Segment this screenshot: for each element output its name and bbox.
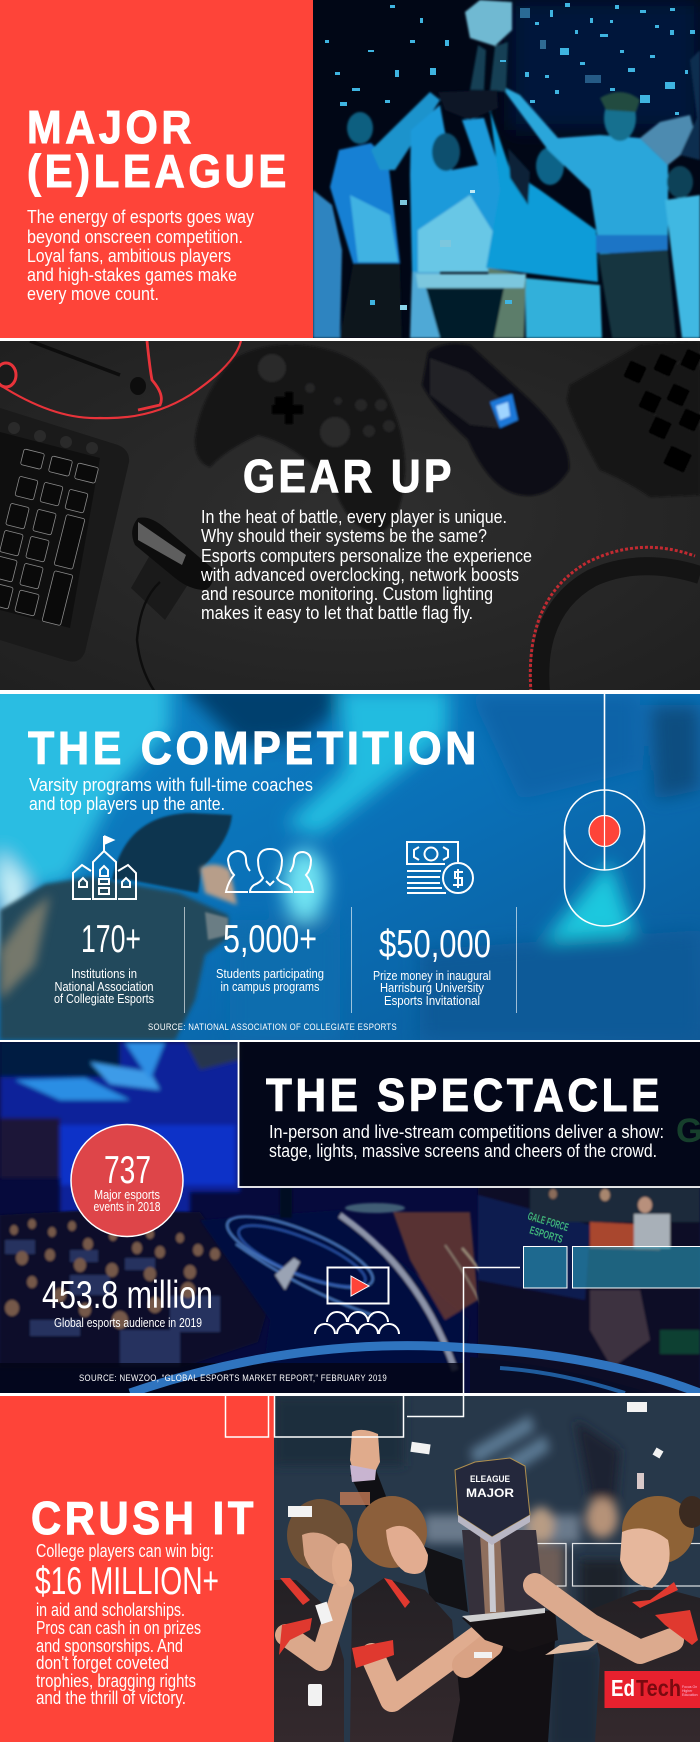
icon: headset [530, 547, 700, 692]
intro text: beyond onscreen competition. [27, 227, 243, 247]
text: gear up body: makes it easy to let that battle flag fly. [201, 603, 473, 623]
icon: money [407, 842, 473, 893]
logo: edtech: Education [682, 1693, 698, 1697]
text: gear up body: In the heat of battle, every player is unique. [201, 507, 507, 527]
photo: hand holding mouse [0, 813, 237, 1040]
text: competition body [29, 775, 313, 814]
overlay outline squares behind players [532, 1544, 700, 1586]
stage [200, 1188, 480, 1372]
panel: gear up [0, 341, 700, 692]
blurred blue background [0, 694, 700, 1040]
stat: audience: 453.8 million [42, 1274, 213, 1317]
text: crush it body: College players can win big: [36, 1541, 214, 1561]
intro text: The energy of esports goes way [27, 207, 254, 227]
podium [416, 274, 526, 288]
title: major (e)league: MAJOR [27, 101, 195, 153]
icon: red earbuds cable [0, 341, 241, 418]
intro text: every move count. [27, 284, 159, 304]
panel: the spectacle [0, 1042, 700, 1393]
stat circle: 737 events: 737 [104, 1149, 151, 1192]
heading: crush it: CRUSH IT [31, 1492, 257, 1544]
spectacle text box [238, 1042, 700, 1187]
crowd [0, 1210, 268, 1368]
intro text: Loyal fans, ambitious players [27, 246, 231, 266]
text: competition body: and top players up the ante. [29, 794, 225, 814]
heading: gear up: GEAR UP [243, 450, 455, 502]
text: gear up body: and resource monitoring. Custom lighting [201, 584, 493, 604]
text: crush it body: Pros can cash in on prizes [36, 1618, 201, 1638]
stat: 5,000+: 5,000+ [223, 918, 317, 961]
icon: people [226, 849, 313, 892]
logo: edtech: Tech [636, 1675, 681, 1701]
booth screen text: ESPORTS [528, 1225, 564, 1246]
trophy with league text: MAJOR [466, 1486, 514, 1500]
stat: 5,000+: in campus programs [220, 979, 320, 994]
stat: $50,000 [373, 923, 491, 1008]
text: gear up body: with advanced overclocking, network boosts [200, 565, 519, 585]
panel: the competition [0, 680, 700, 1040]
dark centre figure [448, 1640, 555, 1742]
teal overlay squares [524, 1246, 700, 1288]
icon: mouse outline with red button [564, 694, 644, 926]
stat: $50,000: $50,000 [379, 923, 491, 966]
text: crush it body: $16 MILLION+ [35, 1560, 219, 1603]
dark bottom band [0, 1363, 463, 1393]
red intro background [0, 0, 313, 338]
stat: audience: Global esports audience in 2019 [54, 1315, 202, 1330]
booth screen text [522, 1210, 570, 1247]
text: spectacle body: stage, lights, massive screens and cheers of the crowd. [269, 1141, 657, 1161]
text: crush it body [35, 1541, 219, 1708]
logo: edtech: Ed [611, 1675, 635, 1701]
heading: the spectacle: THE SPECTACLE [266, 1069, 663, 1121]
text: spectacle body [269, 1122, 664, 1161]
left player [330, 143, 400, 263]
photo: players lifting trophy [274, 1396, 700, 1742]
stat circle: 737 events: events in 2018 [94, 1199, 160, 1214]
intro text: and high-stakes games make [27, 265, 237, 285]
photo: team lifting trophy in blue confetti [313, 0, 700, 338]
left player [274, 1499, 353, 1742]
stat: audience [42, 1274, 213, 1330]
source: competition: SOURCE: NATIONAL ASSOCIATION OF COLLEGIATE ESPORTS [148, 1022, 397, 1033]
blue arcs [130, 1346, 700, 1393]
icon: school [73, 836, 136, 899]
confetti [325, 3, 695, 310]
logo: edtech: Focus On [682, 1685, 697, 1689]
stat: 5,000+ [216, 925, 324, 994]
logo: edtech [604, 1671, 700, 1708]
text: crush it body: and sponsorships. And [36, 1636, 183, 1656]
icon: webcam [131, 517, 213, 692]
logo: edtech: Higher [682, 1689, 693, 1693]
stat: $50,000: Esports Invitational [384, 993, 480, 1008]
stat: 170+: National Association [54, 979, 154, 994]
photo: arena with crowd and stage [0, 1042, 700, 1393]
icon: game controller [195, 345, 405, 533]
middle player [350, 1430, 490, 1742]
stat: $50,000: Prize money in inaugural [373, 968, 491, 983]
icon: video and audience [315, 1268, 399, 1334]
centre player [410, 105, 506, 272]
trophy [465, 0, 512, 46]
dark desk background [0, 341, 700, 690]
third player [486, 110, 598, 282]
text: competition body: Varsity programs with full-time coaches [29, 775, 313, 795]
icon: keyboard [0, 408, 129, 662]
right player [535, 1496, 700, 1742]
panel: major eleague intro [0, 0, 700, 338]
trophy with league text [455, 1458, 558, 1652]
stat: 170+: 170+ [81, 918, 141, 961]
text: crush it body: in aid and scholarships. [36, 1600, 185, 1620]
icon: gaming mouse [422, 344, 569, 496]
text: gear up body: Esports computers personalize the experience [201, 546, 532, 566]
stat circle: 737 events [71, 1124, 183, 1236]
red crush it background [0, 1396, 274, 1742]
right player [500, 85, 668, 254]
icon: keypad [567, 341, 700, 497]
source: spectacle: SOURCE: NEWZOO, “GLOBAL ESPORTS MARKET REPORT,” FEBRUARY 2019 [79, 1373, 387, 1384]
stat: 170+ [54, 918, 154, 1006]
trophy with league text: ELEAGUE [470, 1474, 510, 1484]
stat: 5,000+: Students participating [216, 966, 324, 981]
overlay outlined rectangles and connector lines [226, 1268, 520, 1437]
right booth [478, 1187, 700, 1393]
text: gear up body: Why should their systems be the same? [201, 526, 487, 546]
stat: $50,000: Harrisburg University [380, 980, 484, 995]
stat: 170+: Institutions in [71, 966, 137, 981]
title: major (e)league [27, 101, 290, 197]
text: gear up body [200, 507, 532, 623]
text: crush it body: don't forget coveted [36, 1653, 169, 1673]
right edge person [665, 195, 700, 338]
white separator [0, 1393, 700, 1396]
intro text [27, 207, 254, 304]
confetti pieces [288, 1402, 663, 1706]
heading: the competition: THE COMPETITION [28, 722, 480, 774]
stat: 170+: of Collegiate Esports [54, 991, 154, 1006]
booth screen text: GALE FORCE [526, 1210, 570, 1234]
stat circle: 737 events: Major esports [94, 1187, 160, 1202]
left edge person [313, 190, 342, 338]
text: crush it body: and the thrill of victory. [36, 1688, 186, 1708]
title: major (e)league: (E)LEAGUE [27, 145, 290, 197]
text: crush it body: trophies, bragging rights [36, 1671, 196, 1691]
text: spectacle body: In-person and live-stream competitions deliver a show: [269, 1122, 664, 1142]
panel: crush it [0, 1268, 700, 1742]
